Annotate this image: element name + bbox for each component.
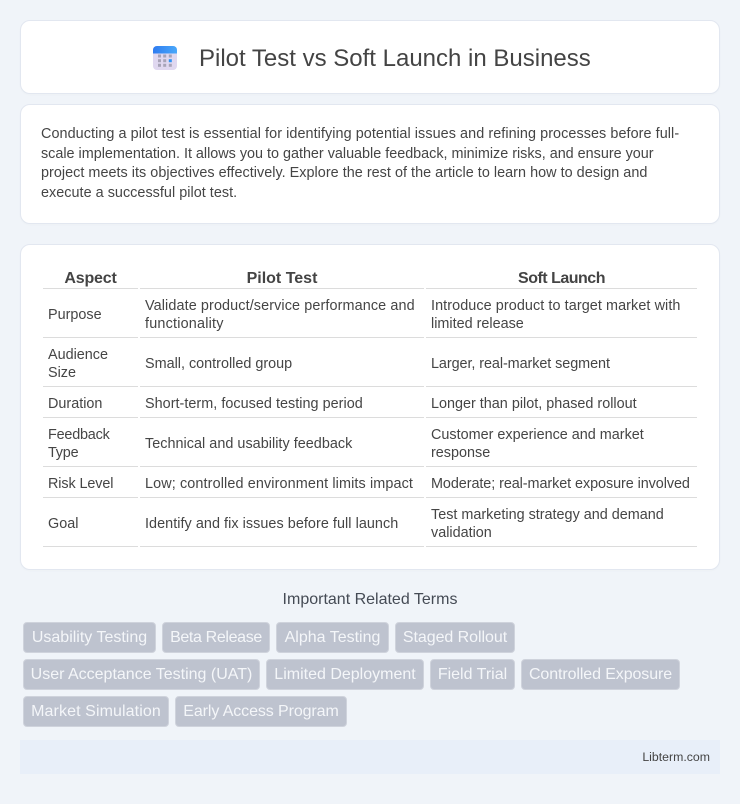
tag <box>23 659 260 690</box>
row: audience size <box>48 347 610 381</box>
tag: Usability Testing <box>32 629 147 646</box>
row: purpose <box>48 298 680 332</box>
row: feedback type: response <box>431 445 490 461</box>
row: purpose: limited release <box>431 316 524 332</box>
row: audience size: Small, controlled group <box>145 356 292 372</box>
row: goal: Goal <box>48 516 78 532</box>
tag <box>23 622 156 653</box>
tag: Staged Rollout <box>403 629 507 646</box>
tag <box>266 659 424 690</box>
tag: Market Simulation <box>31 703 161 720</box>
intro text: project meets its objectives effectively. Explore the rest of the article to learn how to design and <box>41 165 647 181</box>
tag: Early Access Program <box>183 703 339 720</box>
related terms heading: Important Related Terms <box>283 591 457 608</box>
row: goal <box>48 507 664 541</box>
icon: calendar <box>153 46 177 70</box>
tag <box>521 659 680 690</box>
intro panel <box>20 104 720 224</box>
row: goal: Identify and fix issues before full launch <box>145 516 398 532</box>
row: audience size: Audience <box>48 347 108 363</box>
row: duration: Short-term, focused testing period <box>145 396 363 412</box>
tag: Beta Release <box>170 629 262 646</box>
row: duration <box>48 396 637 412</box>
intro text: scale implementation. It allows you to gather valuable feedback, minimize risks, and ensure your <box>41 146 654 162</box>
row: feedback type: Technical and usability feedback <box>145 436 352 452</box>
row: purpose: Validate product/service performance and <box>145 298 415 314</box>
tag <box>276 622 389 653</box>
row: feedback type: Customer experience and market <box>431 427 644 443</box>
table header: Aspect <box>64 270 117 287</box>
row: risk level <box>48 476 690 492</box>
footer bar <box>20 740 720 774</box>
tag <box>175 696 347 727</box>
tag: Controlled Exposure <box>529 666 672 683</box>
row: purpose: Introduce product to target market with <box>431 298 680 314</box>
row: audience size: Size <box>48 365 76 381</box>
comparison table panel <box>20 244 720 570</box>
tag: Field Trial <box>438 666 507 683</box>
row: risk level: Risk Level <box>48 476 113 492</box>
footer source: Libterm.com <box>642 750 710 764</box>
row: feedback type: Feedback <box>48 427 110 443</box>
tag <box>162 622 270 653</box>
intro text: execute a successful pilot test. <box>41 185 237 201</box>
row: audience size: Larger, real-market segment <box>431 356 610 372</box>
row: goal: Test marketing strategy and demand <box>431 507 664 523</box>
tag <box>430 659 515 690</box>
tag <box>395 622 515 653</box>
row: feedback type <box>48 427 644 461</box>
row: duration: Longer than pilot, phased rollout <box>431 396 637 412</box>
tag: Limited Deployment <box>274 666 416 683</box>
table header: Soft Launch <box>518 270 605 287</box>
row: feedback type: Type <box>48 445 78 461</box>
related term tags <box>23 622 680 727</box>
table header <box>64 270 605 287</box>
row: purpose: functionality <box>145 316 224 332</box>
header panel <box>20 20 720 94</box>
intro text: Conducting a pilot test is essential for identifying potential issues and refining processes before full- <box>41 126 679 142</box>
row: purpose: Purpose <box>48 307 102 323</box>
row: duration: Duration <box>48 396 102 412</box>
tag: User Acceptance Testing (UAT) <box>31 666 252 683</box>
row: risk level: Moderate; real-market exposure involved <box>431 476 690 492</box>
row: goal: validation <box>431 525 492 541</box>
intro text <box>41 126 679 201</box>
title: Pilot Test vs Soft Launch in Business <box>199 45 591 72</box>
tag: Alpha Testing <box>285 629 380 646</box>
row: risk level: Low; controlled environment limits impact <box>145 476 413 492</box>
tag <box>23 696 169 727</box>
table header: Pilot Test <box>247 270 317 287</box>
